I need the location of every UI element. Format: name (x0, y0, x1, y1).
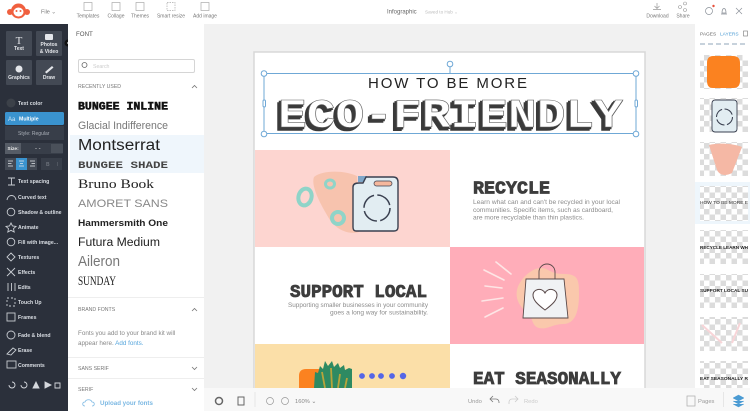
layer: support local: SUPPORT LOCAL SU (700, 288, 748, 293)
effect menu: Edits (18, 285, 31, 291)
icon: shopping bag with heart (523, 264, 568, 318)
layer: orange shape (700, 55, 748, 89)
icons: help, bell, close (706, 5, 742, 14)
style: Style: Regular (18, 131, 50, 137)
toolbar tools: Themes (131, 14, 150, 20)
size control (5, 143, 63, 154)
panel: support local text (288, 283, 428, 316)
effect menu: Curved text (18, 195, 47, 201)
brand fonts section: BRAND FONTS (78, 307, 116, 313)
history and layer icons (9, 382, 60, 388)
rings (297, 180, 344, 224)
effect menu: Erase (18, 348, 32, 354)
panel: support local text: goes a long way for sustainability. (330, 310, 428, 316)
download and share: Share (676, 14, 690, 20)
effect menu: Shadow & outline (18, 210, 62, 216)
font list: Futura Medium (78, 237, 160, 249)
font list: Bruno Book (78, 176, 155, 191)
main title: ECO-FRIENDLY (275, 97, 620, 143)
previous layer sliver (700, 43, 748, 45)
tool tiles: T (16, 35, 23, 47)
toolbar tools: Templates (77, 14, 100, 20)
panel: recycle illustration (255, 150, 450, 247)
font list (70, 102, 204, 288)
font list: SUNDAY (78, 273, 116, 288)
recently used heading (78, 84, 197, 90)
tool tiles: Text (14, 46, 24, 52)
selection box (261, 61, 639, 137)
tabs: PAGES (700, 32, 716, 38)
tool tiles (6, 31, 62, 85)
bottom bar (204, 388, 750, 411)
font list: Hammersmith One (78, 218, 168, 229)
title line: HOW TO BE MORE (368, 75, 527, 92)
panel: eat seasonally illustration (255, 344, 450, 388)
effect menu (6, 178, 62, 369)
panel: recycle text (473, 180, 620, 222)
serif section (68, 378, 204, 393)
file menu: File ⌄ (41, 10, 56, 16)
blob (517, 268, 579, 328)
effect menu: Textures (18, 255, 39, 261)
style (5, 126, 64, 140)
toolbar tools: Smart resize (157, 14, 185, 20)
download and share (646, 2, 690, 20)
text color: Text color (18, 101, 42, 107)
text color (6, 98, 42, 108)
dots (359, 373, 406, 379)
effect menu: Effects (18, 270, 35, 276)
tool tiles: & Video (40, 49, 58, 55)
size control: Size: (8, 146, 19, 152)
alignment buttons: B (46, 162, 50, 168)
font list: BUNGEE INLINE (78, 102, 168, 114)
sparkle lines (482, 262, 511, 317)
left tool rail (0, 24, 72, 411)
panel: support local text: Supporting smaller businesses in your community (288, 303, 428, 309)
layer: faint lines (700, 317, 748, 351)
alignment buttons (5, 158, 62, 170)
font list: Aileron (78, 253, 120, 270)
redo: Redo (524, 399, 538, 405)
zoom controls (266, 398, 316, 405)
pages button (687, 396, 715, 406)
main title: ECO-FRIENDLY (276, 96, 622, 142)
orange pot (299, 369, 320, 388)
icon: layers (733, 395, 744, 407)
layers panel (695, 24, 750, 388)
recently used heading: RECENTLY USED (78, 84, 121, 90)
brand fonts section: appear here. Add fonts. (78, 340, 144, 347)
layer: heading selected: HOW TO BE MORE E (700, 200, 748, 205)
undo (468, 396, 499, 405)
font list: Montserrat (78, 137, 161, 154)
font list: BUNGEE SHADE (78, 160, 168, 172)
tool tiles: Graphics (8, 75, 30, 81)
layer: recycle (700, 230, 748, 264)
multiple selected: Aa (8, 117, 16, 123)
download and share: Download (646, 14, 669, 20)
layer: eat seasonally (700, 361, 749, 388)
undo: Undo (468, 399, 482, 405)
layer: peach shape (700, 142, 748, 176)
canvas background (204, 24, 695, 388)
pages button: Pages (698, 399, 715, 405)
brand fonts section: Fonts you add to your brand kit will (78, 330, 175, 337)
toolbar tools: Collage (108, 14, 125, 20)
top toolbar (0, 0, 750, 24)
layer: support local (700, 274, 748, 308)
document title: Infographic (387, 10, 417, 16)
panel: recycle text: Learn what can and can't be recycled in your local (473, 200, 620, 206)
serif section: SERIF (78, 387, 93, 393)
layer: eat seasonally: EAT SEASONALLY R (700, 376, 749, 381)
panel: eat seasonally text: EAT SEASONALLY (473, 370, 621, 390)
save status: Saved to Hub ⌄ (425, 10, 458, 14)
tabs: LAYERS (720, 32, 739, 38)
brand fonts section (68, 298, 204, 358)
redo (509, 396, 538, 405)
blob (313, 172, 359, 233)
upload fonts: Upload your fonts (100, 400, 153, 407)
icon: recycling jug (353, 176, 398, 231)
panel: recycle text: are more recyclable than thin plastics. (473, 216, 584, 222)
tool tiles: Draw (43, 75, 55, 81)
search box (78, 60, 194, 72)
layer: heading selected (695, 182, 750, 224)
effect menu: Comments (18, 363, 45, 369)
toolbar tools: Add image (193, 14, 217, 20)
effect menu: Frames (18, 315, 37, 321)
icon: leafy greens (314, 361, 352, 388)
icon: monkey logo (7, 4, 30, 18)
search box: Search (93, 64, 110, 70)
sans serif section: SANS SERIF (78, 366, 109, 372)
effect menu: Fill with image... (18, 240, 59, 246)
tabs (700, 31, 748, 38)
panel: recycle text: communities. Specific items, such as cardboard, (473, 208, 613, 214)
layer: recycle: RECYCLE LEARN WH (700, 245, 748, 250)
effect menu: Touch Up (18, 300, 42, 306)
font list: Glacial Indifference (78, 120, 168, 132)
size control: - - (35, 146, 41, 152)
zoom controls: 160% ⌄ (295, 399, 316, 405)
toolbar tools (77, 2, 217, 20)
effect menu: Text spacing (18, 179, 49, 185)
upload fonts (68, 395, 204, 411)
multiple selected: Multiple (19, 116, 39, 122)
panel: recycle text: RECYCLE (473, 180, 550, 200)
panel: support local text: SUPPORT LOCAL (290, 283, 427, 303)
collapse button (64, 40, 72, 46)
layer: jug (700, 98, 748, 132)
multiple selected (5, 112, 64, 125)
infographic page (254, 52, 645, 392)
effect menu: Fade & blend (18, 333, 51, 339)
effect menu: Animate (18, 225, 39, 231)
icons: settings and panel (216, 397, 244, 405)
sans serif section (78, 366, 197, 372)
alignment buttons: I (57, 162, 58, 168)
panel heading: FONT (76, 31, 93, 38)
font list: AMORET SANS (78, 198, 168, 210)
main title: ECO-FRIENDLY (278, 94, 623, 140)
tool tiles: Photos (41, 42, 58, 48)
font panel (68, 24, 204, 411)
panel: shopping bag illustration (450, 247, 644, 344)
